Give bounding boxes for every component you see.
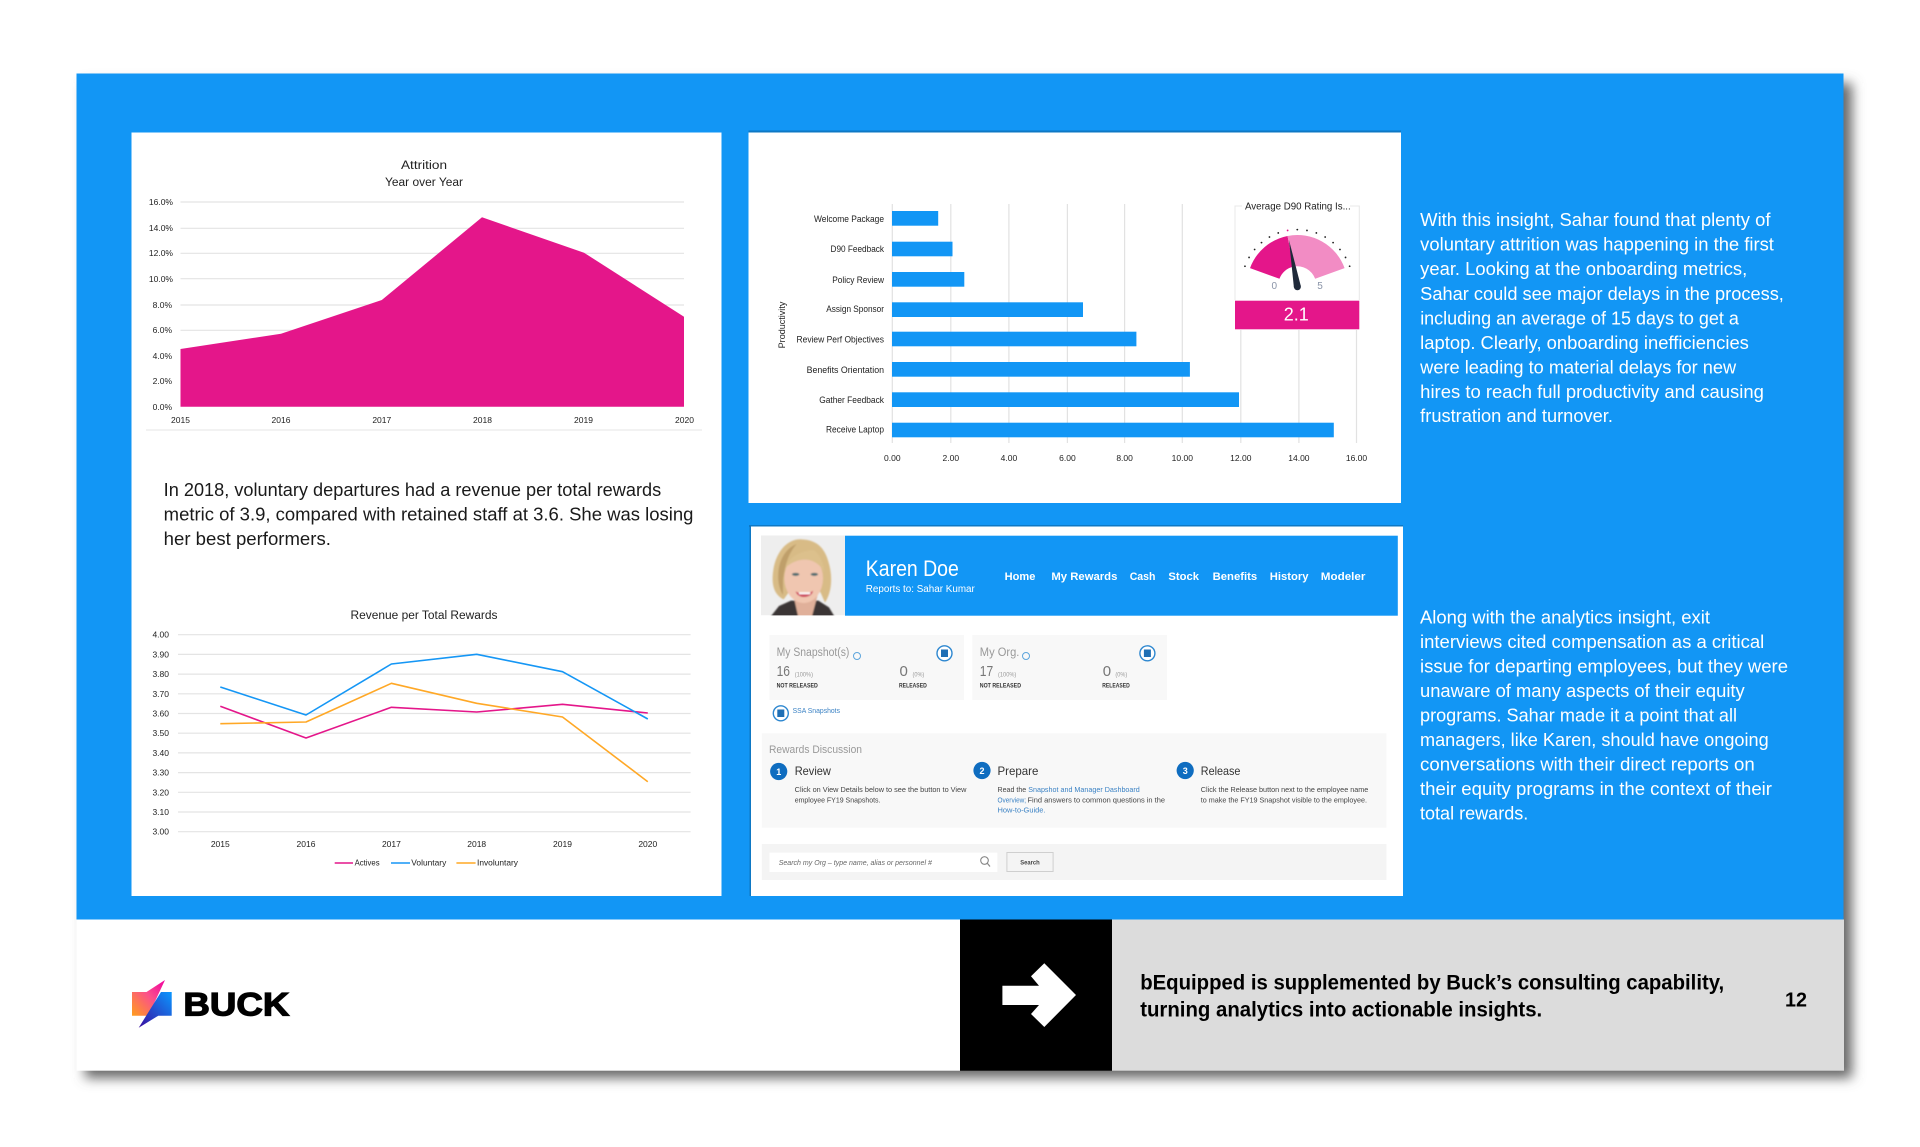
paragraph: 2018 departures: In 2018, voluntary departures had a revenue per total rewards: [164, 480, 661, 500]
attrition x axis labels: [171, 415, 694, 425]
bar category labels: Policy Review: [832, 275, 884, 285]
step 2: prepare: Overview;: [998, 795, 1026, 804]
blue content panel: [76, 74, 1844, 920]
step 2: prepare: Prepare: [998, 764, 1039, 778]
card: my org: My Org.: [980, 647, 1019, 659]
paragraph: 2018 departures: her best performers.: [164, 529, 331, 549]
arrow tile: [960, 920, 1112, 1071]
search bar: Search: [1020, 860, 1040, 867]
revenue y axis labels: 3.40: [152, 748, 169, 758]
bar chart x axis labels: 12.00: [1230, 453, 1252, 463]
footer bar: [76, 920, 1844, 1071]
text block: exit interviews: interviews cited compensation as a critical: [1420, 632, 1764, 652]
text block: onboarding insight: With this insight, Sahar found that plenty of: [1420, 210, 1772, 230]
page number: 12: [1785, 990, 1807, 1012]
step 2: prepare: Snapshot and Manager Dashboard: [1028, 785, 1140, 794]
attrition area: [180, 217, 684, 407]
paragraph: 2018 departures: metric of 3.9, compared with retained staff at 3.6. She was losing: [164, 504, 693, 524]
revenue y axis labels: 3.00: [152, 827, 169, 837]
text block: onboarding insight: laptop. Clearly, onboarding inefficiencies: [1420, 333, 1749, 353]
panel: onboarding productivity bar chart: [748, 130, 1401, 503]
revenue x axis labels: 2019: [553, 839, 572, 849]
attrition y axis labels: 4.0%: [153, 351, 172, 361]
attrition y axis labels: 6.0%: [153, 325, 172, 335]
text block: exit interviews: issue for departing employees, but they were: [1420, 656, 1788, 676]
link: SSA snapshots: SSA Snapshots: [793, 706, 840, 715]
card: my snapshots: NOT RELEASED: [777, 684, 818, 690]
bar chart x axis labels: 8.00: [1116, 453, 1133, 463]
step 2: prepare: 2: [979, 766, 985, 776]
panel: manager dashboard screenshot: [749, 525, 1403, 896]
attrition chart title: Year over Year: [385, 177, 463, 189]
card: my snapshots: 0: [900, 663, 908, 680]
attrition x axis labels: 2016: [272, 415, 291, 425]
attrition y axis labels: 16.0%: [149, 197, 173, 207]
attrition x axis labels: 2020: [675, 415, 694, 425]
text block: exit interviews: total rewards.: [1420, 803, 1528, 823]
revenue y axis labels: 3.50: [152, 728, 169, 738]
gauge: average D90 rating: 0: [1272, 281, 1278, 292]
attrition x axis labels: 2015: [171, 415, 190, 425]
step 2: prepare: How-to-Guide.: [998, 806, 1046, 815]
revenue x axis labels: 2017: [382, 839, 401, 849]
gauge: average D90 rating: 2.1: [1284, 304, 1309, 324]
attrition x axis labels: 2018: [473, 415, 492, 425]
revenue x axis labels: 2016: [297, 839, 316, 849]
gauge: average D90 rating: [1235, 200, 1359, 330]
bar chart x axis labels: 6.00: [1059, 453, 1076, 463]
legend: [335, 858, 519, 868]
step 1: review: Click on View Details below to see the button to View: [795, 785, 967, 794]
navigation links: Home: [1005, 571, 1035, 583]
card: my snapshots: My Snapshot(s): [777, 647, 850, 659]
navigation links: My Rewards: [1051, 571, 1117, 583]
takeaway text: bEquipped is supplemented by Buck’s consulting capability,: [1140, 972, 1724, 994]
text block: onboarding insight: voluntary attrition was happening in the first: [1420, 235, 1774, 255]
y axis title: productivity: Productivity: [777, 301, 787, 348]
card: rewards discussion steps: Rewards Discussion: [769, 744, 862, 756]
revenue x axis labels: 2015: [211, 839, 230, 849]
attrition x axis labels: 2019: [574, 415, 593, 425]
revenue y axis labels: 3.90: [152, 649, 169, 659]
card: my snapshots: (0%): [912, 672, 924, 678]
legend: Voluntary: [411, 858, 447, 868]
gauge: average D90 rating: Average D90 Rating Is...: [1245, 202, 1351, 212]
bar category labels: Benefits Orientation: [807, 365, 884, 375]
bar category labels: Gather Feedback: [819, 395, 884, 405]
revenue y axis labels: 4.00: [152, 630, 169, 640]
dashboard header bar: [761, 535, 1398, 617]
step 3: release: 3: [1183, 766, 1188, 776]
card: my org: [972, 635, 1167, 700]
step 3: release: to make the FY19 Snapshot visible to the employee.: [1201, 795, 1367, 804]
step 2: prepare: Find answers to common questions in the: [1028, 795, 1165, 804]
step 1: review: [770, 763, 967, 804]
attrition chart title: Attrition: [401, 160, 447, 172]
navigation links: Stock: [1168, 571, 1200, 583]
step 1: review: employee FY19 Snapshots.: [795, 795, 880, 804]
bar chart x axis labels: 4.00: [1001, 453, 1017, 463]
legend: Involuntary: [477, 858, 519, 868]
link: SSA snapshots: [773, 706, 840, 721]
navigation links: History: [1270, 571, 1309, 583]
takeaway text: [1140, 972, 1724, 1022]
bar category labels: Welcome Package: [814, 214, 884, 224]
step 3: release: [1177, 762, 1368, 804]
chart: attrition area chart: [146, 160, 702, 430]
revenue y axis labels: 3.60: [152, 708, 169, 718]
text block: onboarding insight: [1419, 210, 1784, 426]
slide drop shadow: [85, 83, 1852, 1078]
bar category labels: Assign Sponsor: [826, 304, 884, 314]
bar category labels: Receive Laptop: [826, 425, 884, 435]
chart: revenue per total rewards line chart: [152, 610, 691, 868]
revenue x axis labels: [211, 839, 658, 849]
line: involuntary: [220, 683, 648, 782]
attrition y axis labels: [149, 197, 173, 412]
step 3: release: Click the Release button next to the employee name: [1201, 785, 1368, 794]
card: my snapshots: 16: [777, 663, 790, 680]
text block: onboarding insight: year. Looking at the onboarding metrics,: [1420, 259, 1747, 279]
employee name: Karen Doe: [866, 556, 959, 581]
text block: onboarding insight: were leading to material delays for new: [1419, 357, 1737, 377]
attrition chart title: [385, 160, 463, 189]
bar chart x axis labels: 16.00: [1346, 453, 1367, 463]
attrition y axis labels: 0.0%: [153, 402, 172, 412]
revenue x axis labels: 2020: [638, 839, 658, 849]
text block: exit interviews: managers, like Karen, should have ongoing: [1420, 730, 1769, 750]
bars: [892, 211, 1334, 437]
text block: exit interviews: Along with the analytics insight, exit: [1420, 607, 1710, 627]
bar chart x axis labels: 14.00: [1288, 453, 1310, 463]
panel: attrition and revenue charts: [132, 132, 722, 896]
text block: exit interviews: unaware of many aspects of their equity: [1420, 681, 1745, 701]
card: my org: 17: [980, 663, 993, 680]
text block: exit interviews: conversations with their direct reports on: [1420, 754, 1755, 774]
reports-to line: Reports to: Sahar Kumar: [866, 584, 975, 595]
card: my org: NOT RELEASED: [980, 684, 1022, 690]
card: my org: RELEASED: [1102, 684, 1130, 690]
legend: Actives: [355, 858, 380, 868]
navigation links: Cash: [1130, 571, 1156, 583]
text block: exit interviews: programs. Sahar made it a point that all: [1420, 705, 1737, 725]
attrition y axis labels: 8.0%: [153, 300, 172, 310]
attrition y axis labels: 2.0%: [153, 376, 172, 386]
bar chart x axis labels: [884, 453, 1367, 463]
bar category labels: Review Perf Objectives: [796, 335, 884, 345]
attrition y axis labels: 14.0%: [149, 223, 173, 233]
bar chart x axis labels: 0.00: [884, 453, 901, 463]
step 3: release: Release: [1201, 764, 1241, 778]
text block: exit interviews: their equity programs in the context of their: [1420, 779, 1772, 799]
revenue y axis labels: 3.30: [152, 768, 169, 778]
navigation links: Modeler: [1321, 571, 1366, 583]
paragraph: 2018 departures: [164, 480, 693, 549]
card: rewards discussion steps: [762, 733, 1386, 828]
revenue y axis labels: 3.80: [152, 669, 169, 679]
attrition y axis labels: 12.0%: [149, 248, 173, 258]
revenue y axis labels: [152, 630, 169, 837]
logo: Buck: [132, 980, 289, 1028]
navigation links: Benefits: [1213, 571, 1257, 583]
step 1: review: Review: [795, 764, 831, 778]
card: my snapshots: [769, 635, 964, 700]
bar category labels: [796, 214, 884, 435]
card: my org: (100%): [998, 672, 1016, 678]
text block: onboarding insight: including an average of 15 days to get a: [1420, 308, 1740, 328]
bar chart x axis labels: 10.00: [1172, 453, 1193, 463]
card: my snapshots: (100%): [795, 672, 813, 678]
logo: Buck: BUCK: [183, 987, 289, 1023]
text block: onboarding insight: Sahar could see major delays in the process,: [1420, 284, 1784, 304]
search bar: [762, 844, 1386, 880]
attrition y axis labels: 10.0%: [149, 274, 173, 284]
text block: onboarding insight: frustration and turnover.: [1420, 406, 1613, 426]
line: voluntary: [220, 654, 648, 719]
step 2: prepare: Read the: [998, 785, 1026, 794]
revenue y axis labels: 3.70: [152, 689, 169, 699]
search bar: Search my Org – type name, alias or personnel #: [779, 858, 933, 867]
bar chart x axis labels: 2.00: [943, 453, 959, 463]
revenue chart title: Revenue per Total Rewards: [350, 610, 498, 622]
takeaway text: turning analytics into actionable insights.: [1140, 998, 1542, 1022]
attrition x axis labels: 2017: [372, 415, 392, 425]
text block: onboarding insight: hires to reach full productivity and causing: [1420, 382, 1764, 402]
icon: Karen Doe portrait: [761, 535, 845, 617]
card: my org: 0: [1103, 663, 1111, 680]
navigation links: [1005, 571, 1366, 583]
step 1: review: 1: [776, 767, 781, 777]
revenue y axis labels: 3.10: [152, 807, 169, 817]
step 2: prepare: [973, 762, 1165, 815]
gauge: average D90 rating: 5: [1317, 281, 1323, 292]
card: my snapshots: RELEASED: [899, 684, 927, 690]
text block: exit interviews: [1420, 607, 1788, 823]
bar category labels: D90 Feedback: [830, 244, 884, 254]
revenue x axis labels: 2018: [467, 839, 486, 849]
revenue y axis labels: 3.20: [152, 787, 169, 797]
line: actives: [220, 704, 648, 738]
card: my org: (0%): [1115, 672, 1127, 678]
